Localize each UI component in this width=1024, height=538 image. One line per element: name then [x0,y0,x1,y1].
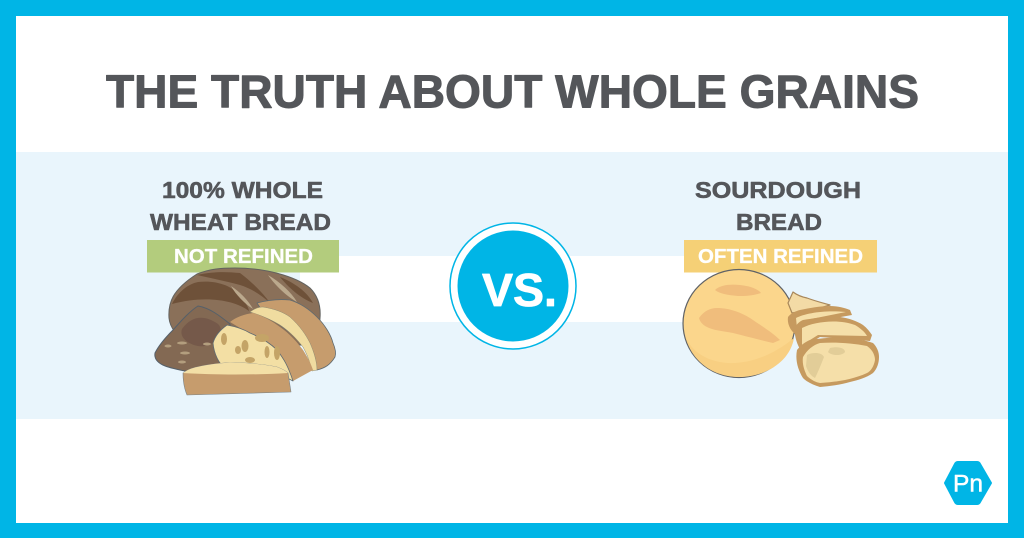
heading: sourdough bread: SOURDOUGH [695,177,861,203]
heading: 100% whole wheat bread [150,177,331,235]
panel: sourdough bread [683,177,879,387]
logo: Pn hexagon: Pn [953,470,983,498]
label: not refined [147,240,339,272]
title: THE TRUTH ABOUT WHOLE GRAINS [106,66,919,118]
vs badge [450,223,576,349]
panel: whole wheat bread [147,177,339,395]
label: often refined: OFTEN REFINED [698,246,863,268]
heading: sourdough bread [695,177,861,235]
label: often refined [684,240,877,272]
label: not refined: NOT REFINED [174,246,313,268]
comparison band [16,152,1008,419]
heading: 100% whole wheat bread: WHEAT BREAD [150,209,331,235]
illustration: whole wheat breads [155,268,336,395]
logo: Pn hexagon [945,462,991,504]
illustration: sourdough loaf and slices [683,270,879,387]
heading: sourdough bread: BREAD [736,209,822,235]
heading: 100% whole wheat bread: 100% WHOLE [162,177,323,203]
vs badge: VS. [482,264,557,316]
